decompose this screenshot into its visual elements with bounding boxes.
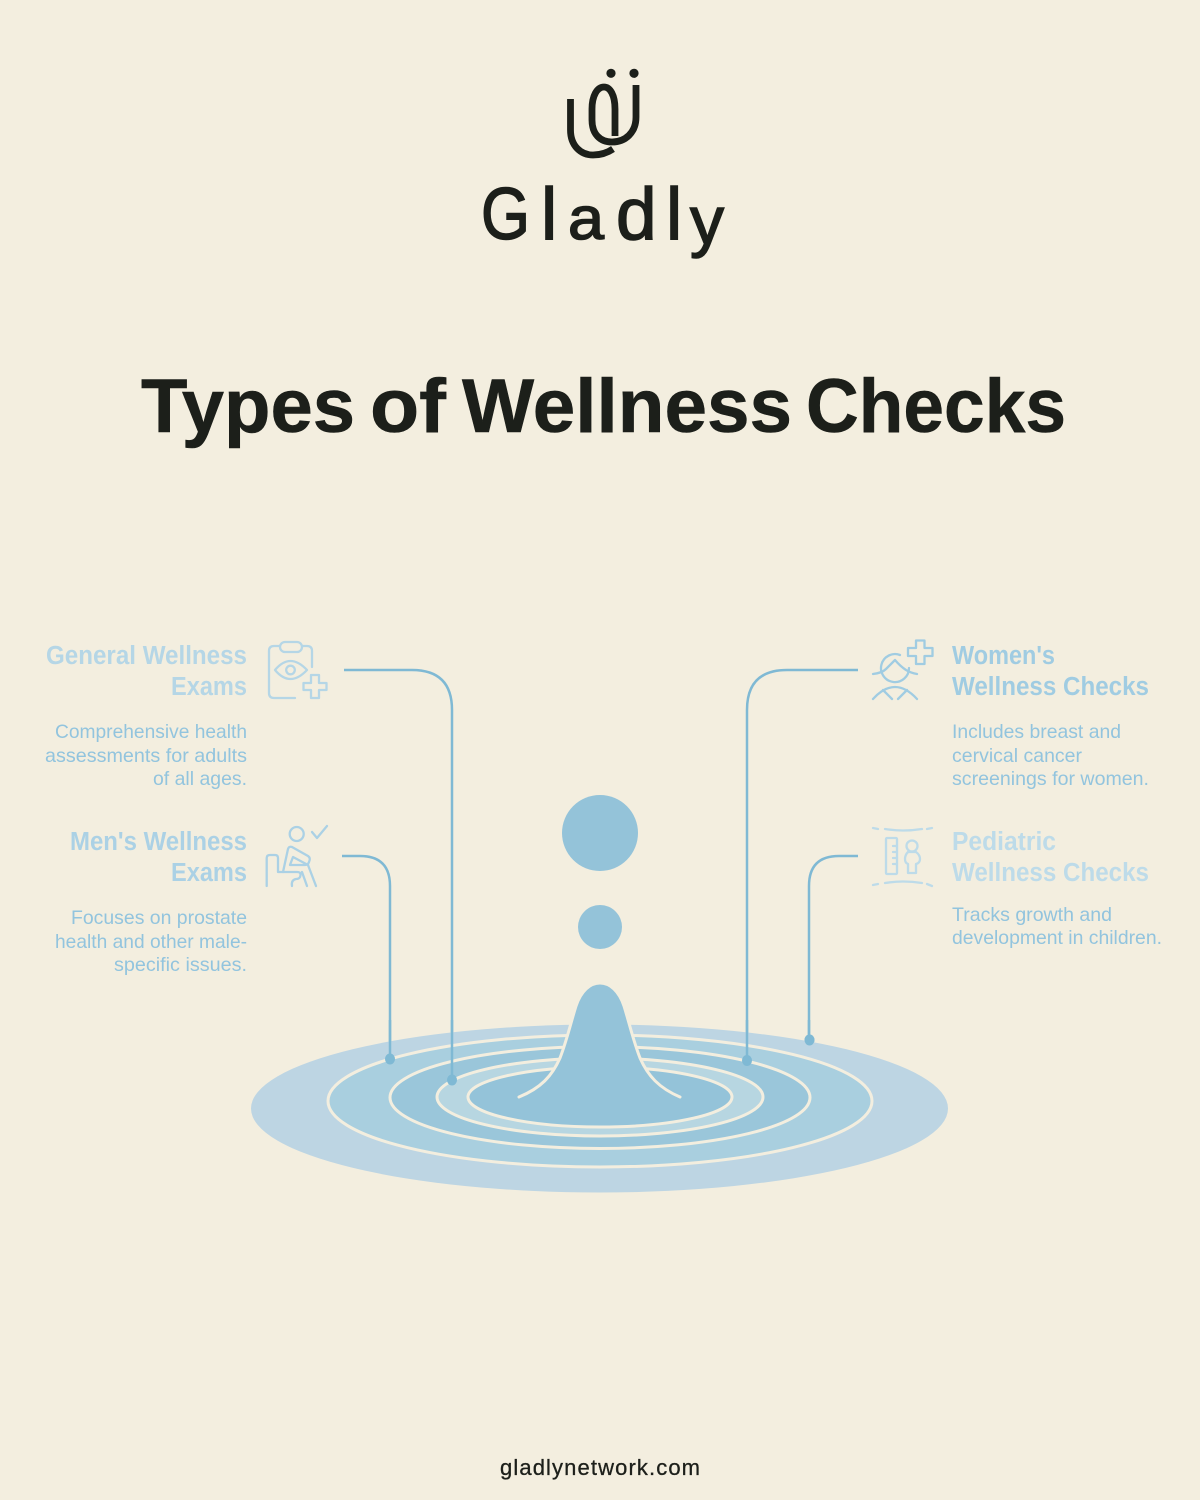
- connector: Women's Wellness Checks: [742, 670, 858, 1066]
- logo wordmark: Gladly: y: [690, 183, 724, 259]
- logo wordmark: Gladly: G: [481, 174, 530, 255]
- logo wordmark: Gladly: d: [616, 174, 657, 255]
- panel: Men's Wellness Exams text: Exams: [171, 859, 247, 887]
- icon: child height ruler: [873, 828, 932, 886]
- water drop: large circle: [562, 795, 638, 871]
- panel: Women's Wellness Checks text: screenings for women.: [952, 768, 1149, 790]
- panel: Men's Wellness Exams text: Men's Wellness: [70, 828, 247, 856]
- connector end dots over ripple: [385, 1020, 814, 1086]
- panel: General Wellness Exams text: [45, 642, 247, 790]
- title: Types: [141, 364, 355, 449]
- panel: Women's Wellness Checks text: cervical cancer: [952, 745, 1083, 767]
- panel: General Wellness Exams text: General Wellness: [46, 642, 247, 670]
- icon: clipboard with eye and plus: [269, 642, 326, 698]
- title: Checks: [806, 364, 1066, 449]
- logo wordmark: Gladly: [481, 174, 724, 259]
- title: Wellness: [462, 364, 792, 449]
- footer url: gladlynetwork.com: [500, 1455, 700, 1480]
- title: [141, 364, 1066, 449]
- connector: General Wellness Exams: [344, 670, 457, 1086]
- connector: Pediatric Wellness Checks: [804, 856, 858, 1046]
- panel: Men's Wellness Exams text: [55, 828, 247, 976]
- panel: Men's Wellness Exams text: health and other male-: [55, 931, 247, 953]
- panel: Pediatric Wellness Checks text: Tracks growth and: [952, 904, 1112, 926]
- icon: woman with plus: [873, 640, 932, 699]
- ripple chart with splash peak: [251, 983, 948, 1192]
- panel: General Wellness Exams text: Exams: [171, 673, 247, 701]
- connector: Men's Wellness Exams: [342, 856, 395, 1064]
- icon: Gladly logo mark: [570, 69, 639, 155]
- panel: Pediatric Wellness Checks text: Wellness Checks: [952, 859, 1149, 887]
- panel: Women's Wellness Checks text: Includes breast and: [952, 721, 1121, 743]
- logo wordmark: Gladly: l: [666, 174, 682, 255]
- panel: Pediatric Wellness Checks text: development in children.: [952, 927, 1162, 949]
- panel: Pediatric Wellness Checks text: Pediatric: [952, 828, 1056, 856]
- title: of: [370, 364, 447, 449]
- panel: General Wellness Exams text: Comprehensive health: [55, 721, 247, 743]
- panel: Men's Wellness Exams text: specific issues.: [114, 954, 247, 976]
- panel: Men's Wellness Exams text: Focuses on prostate: [71, 907, 247, 929]
- icon: seated man with check: [267, 826, 327, 886]
- panel: Pediatric Wellness Checks text: [952, 828, 1162, 949]
- panel: Women's Wellness Checks text: Women's: [952, 642, 1055, 670]
- panel: Women's Wellness Checks text: Wellness Checks: [952, 673, 1149, 701]
- logo wordmark: Gladly: a: [568, 185, 605, 252]
- panel: General Wellness Exams text: of all ages.: [153, 768, 247, 790]
- water drop: small circle: [578, 905, 622, 949]
- panel: General Wellness Exams text: assessments for adults: [45, 745, 247, 767]
- logo wordmark: Gladly: l: [541, 174, 557, 255]
- panel: Women's Wellness Checks text: [952, 642, 1149, 790]
